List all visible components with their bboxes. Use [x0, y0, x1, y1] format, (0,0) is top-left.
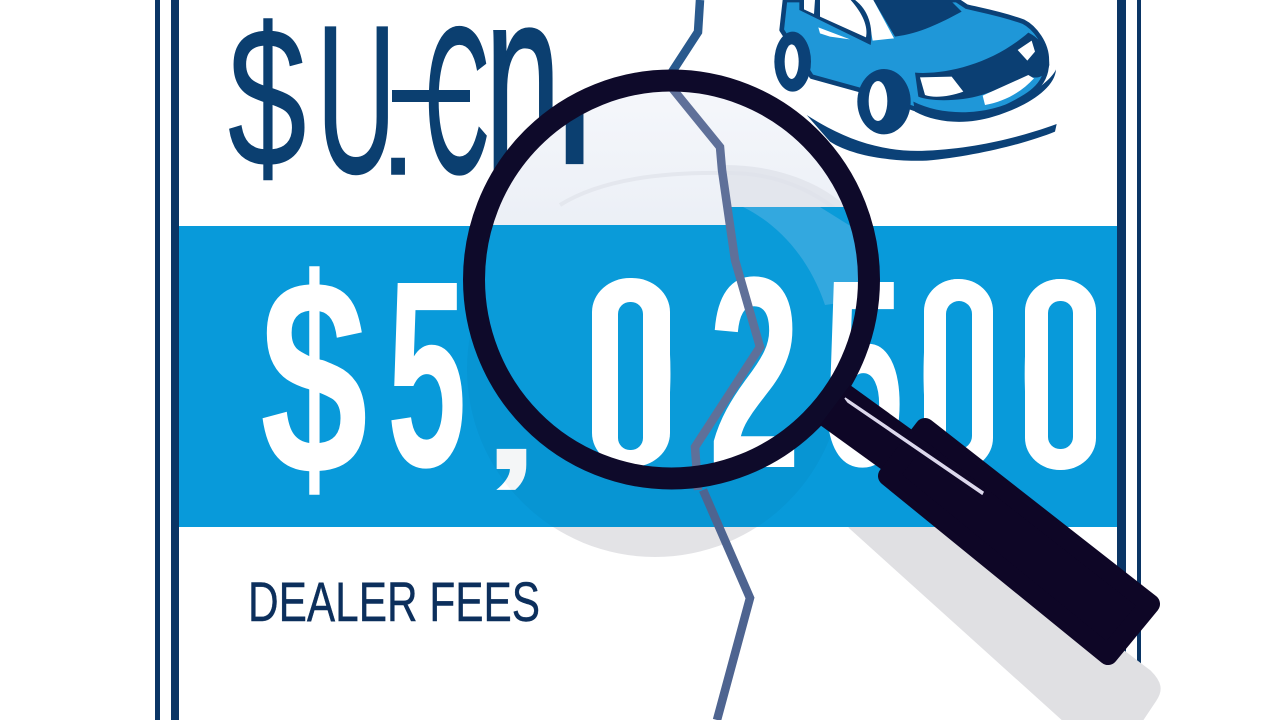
lens interior — [492, 92, 858, 305]
title text — [228, 0, 561, 229]
amount digits left of lens: $ — [260, 222, 368, 534]
price band — [179, 226, 1117, 527]
document frame — [155, 0, 1141, 720]
icon: car — [774, 0, 1057, 161]
handle highlight — [845, 398, 983, 494]
amount digits left of lens: , — [482, 347, 540, 498]
amount digits left of lens — [260, 222, 540, 534]
caption: dealer fees: DEALER FEES — [248, 570, 540, 633]
magnifying glass — [474, 80, 1150, 655]
amount digits inside and right of lens: 5 — [823, 225, 904, 522]
handle neck — [820, 385, 915, 472]
amount digits inside and right of lens: 0 — [918, 225, 996, 525]
lens ring — [474, 80, 869, 478]
title text: . — [380, 43, 416, 206]
crack line — [672, 0, 760, 720]
amount digits inside and right of lens: 2 — [708, 220, 801, 525]
shadow of magnifier — [467, 181, 1159, 720]
handle grip — [888, 428, 1150, 655]
amount digits inside and right of lens: 0 — [1019, 224, 1099, 524]
amount digits inside and right of lens — [587, 220, 1099, 525]
amount digits inside and right of lens: 0 — [587, 225, 677, 522]
amount digits left of lens: 5 — [387, 227, 467, 523]
